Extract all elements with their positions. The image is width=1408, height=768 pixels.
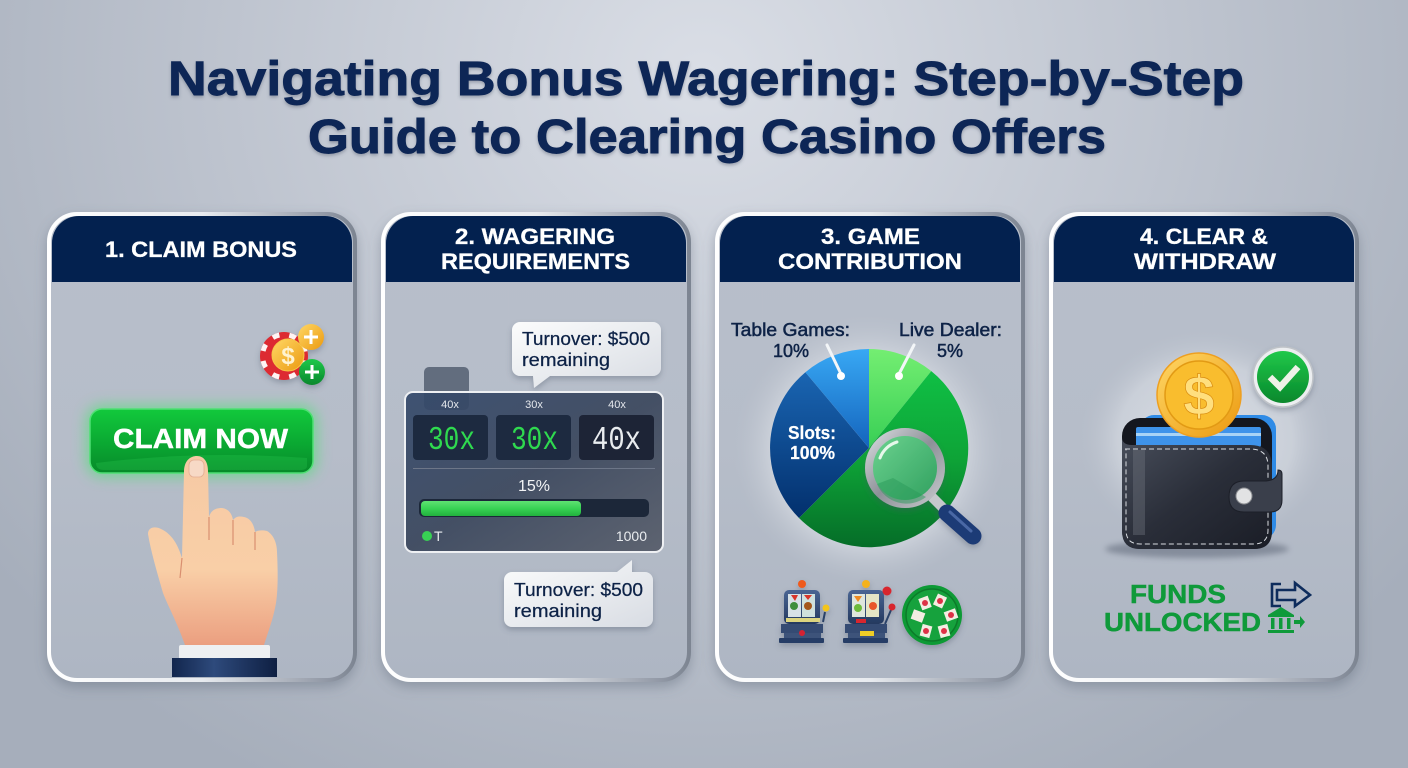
callout: turnover top bbox=[512, 322, 661, 388]
value 1000: 1000 bbox=[616, 528, 647, 544]
multiplier labels: 40x bbox=[441, 399, 459, 411]
callout: turnover bottom: remaining bbox=[514, 601, 602, 621]
callout: turnover top: remaining bbox=[522, 350, 610, 370]
icon: bank with arrow bbox=[1268, 607, 1305, 633]
label: table games 10%: 10% bbox=[773, 341, 809, 361]
icon: slot machine 1 bbox=[779, 580, 830, 643]
callout: turnover bottom bbox=[504, 560, 653, 627]
label: table games 10% bbox=[731, 320, 850, 361]
title bbox=[168, 53, 1244, 164]
callout: turnover bottom: Turnover: $500 bbox=[514, 580, 643, 600]
title: Guide to Clearing Casino Offers bbox=[308, 111, 1106, 164]
icon: slot machine 2 bbox=[843, 580, 896, 643]
icon: casino chip with plus badges bbox=[258, 324, 325, 385]
heading: 2. wagering requirements bbox=[386, 216, 686, 282]
title: Navigating Bonus Wagering: Step-by-Step bbox=[168, 53, 1244, 106]
multiplier cell 30x: 30x bbox=[428, 422, 475, 459]
icon: casino chip with plus badges: $ bbox=[281, 343, 295, 370]
label: table games 10%: Table Games: bbox=[731, 320, 850, 340]
progress percent: 15% bbox=[518, 478, 550, 495]
wallet strap bbox=[1229, 470, 1282, 512]
multiplier cell 40x bbox=[579, 415, 654, 460]
label: live dealer 5% bbox=[899, 320, 1002, 361]
label: funds unlocked: UNLOCKED bbox=[1104, 607, 1261, 637]
heading: 2. wagering requirements: REQUIREMENTS bbox=[441, 249, 630, 274]
multiplier labels bbox=[441, 399, 626, 411]
label: slots 100%: Slots: bbox=[788, 423, 836, 443]
button: claim now: CLAIM NOW bbox=[113, 423, 289, 454]
label: live dealer 5%: Live Dealer: bbox=[899, 320, 1002, 340]
label: slots 100% bbox=[788, 423, 836, 463]
icon: card wheel bbox=[902, 585, 962, 645]
tab behind dashboard bbox=[424, 367, 469, 410]
label: funds unlocked bbox=[1104, 579, 1261, 637]
dashboard panel bbox=[405, 392, 663, 552]
leader: table games bbox=[827, 345, 845, 380]
label: live dealer 5%: 5% bbox=[937, 341, 963, 361]
cuff bbox=[179, 645, 270, 659]
icon: gold dollar coin bbox=[1157, 353, 1241, 437]
heading: 2. wagering requirements: 2. WAGERING bbox=[455, 224, 615, 249]
callout: turnover top: Turnover: $500 bbox=[522, 329, 650, 349]
heading: 4. clear and withdraw: 4. CLEAR & bbox=[1140, 224, 1268, 249]
icon: green check bbox=[1253, 347, 1313, 407]
heading: 4. clear and withdraw: WITHDRAW bbox=[1134, 249, 1276, 274]
multiplier cell 40x: 40x bbox=[592, 422, 641, 459]
pie chart bbox=[770, 349, 968, 547]
snap bbox=[1236, 488, 1252, 504]
progress bar bbox=[419, 499, 649, 517]
panel: step 2 wagering requirements bbox=[383, 214, 689, 680]
heading: 3. game contribution: 3. GAME bbox=[821, 224, 920, 249]
heading: 3. game contribution bbox=[720, 216, 1020, 282]
panel: step 4 clear and withdraw bbox=[1051, 214, 1357, 680]
multiplier cell 30x bbox=[413, 415, 488, 460]
label: funds unlocked: FUNDS bbox=[1130, 579, 1226, 609]
icon: magnifying glass bbox=[869, 432, 973, 536]
leader: live dealer bbox=[895, 345, 914, 380]
heading: 1. claim bonus: 1. CLAIM BONUS bbox=[105, 237, 297, 262]
icon: gold dollar coin: $ bbox=[1183, 364, 1215, 427]
icon: withdraw arrow bbox=[1272, 583, 1310, 606]
button: claim now bbox=[86, 405, 317, 477]
legend dot and T: T bbox=[434, 528, 443, 544]
multiplier labels: 40x bbox=[608, 399, 626, 411]
heading: 1. claim bonus bbox=[52, 216, 352, 282]
label: slots 100%: 100% bbox=[790, 443, 835, 463]
multiplier cell 30x: 30x bbox=[511, 422, 558, 459]
heading: 4. clear and withdraw bbox=[1054, 216, 1354, 282]
sleeve bbox=[172, 658, 277, 677]
icon: wallet bbox=[1105, 415, 1289, 558]
multiplier labels: 30x bbox=[525, 399, 543, 411]
panel: step 3 game contribution bbox=[717, 214, 1023, 680]
heading: 3. game contribution: CONTRIBUTION bbox=[778, 249, 962, 274]
legend dot and T bbox=[422, 528, 443, 544]
multiplier cell 30x bbox=[496, 415, 571, 460]
panel: step 1 claim bonus bbox=[49, 214, 355, 680]
icon: pointing hand bbox=[148, 456, 278, 677]
